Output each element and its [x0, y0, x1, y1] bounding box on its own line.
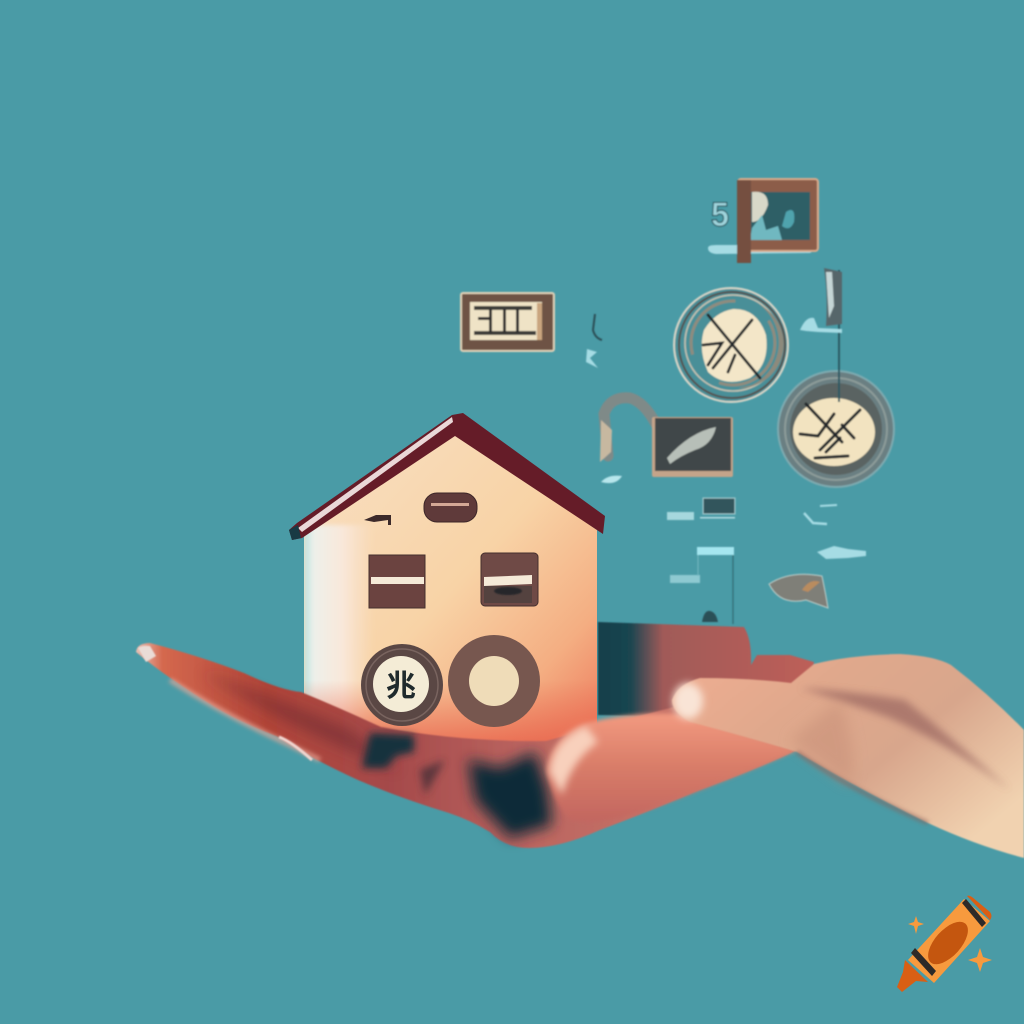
finger shadow: [800, 688, 1010, 790]
icon: hook and tablet box: [600, 398, 733, 477]
sparkle large: [968, 948, 992, 972]
sparkle small: [908, 916, 924, 934]
crayon cap: [967, 896, 992, 920]
finger lower edge light: [170, 680, 320, 760]
connector line: [838, 270, 840, 402]
house walls: [304, 432, 597, 750]
small wall mark: [364, 515, 391, 525]
crayon body: [908, 899, 990, 983]
left coin: 兆: [386, 670, 416, 703]
right window: [481, 553, 538, 606]
icon: crossed circle upper: [674, 288, 788, 402]
icon: top-right vial: [800, 268, 842, 333]
crayon bands: [962, 899, 986, 927]
roof: [289, 413, 605, 540]
small scribbles and labels: [586, 314, 866, 624]
palm dark patches: [362, 733, 414, 768]
finger shading: [200, 672, 400, 770]
left window: [369, 555, 425, 608]
left hand and palm: [136, 643, 797, 848]
icon: framed picture: [708, 179, 818, 263]
knuckle shading: [790, 700, 853, 785]
upper oval window: [424, 493, 477, 522]
crayon label: [921, 915, 975, 971]
lower edge shadow: [797, 752, 928, 823]
thumb base: [547, 714, 797, 822]
right coin: [448, 635, 540, 727]
icon: crossed circle lower: [778, 270, 894, 487]
thumb highlight: [673, 683, 703, 719]
dark object behind house: [598, 622, 814, 716]
house: [289, 413, 605, 755]
hand holding the house: [136, 643, 1024, 858]
crayon tip: [897, 960, 928, 992]
right hand: [672, 654, 1024, 858]
icon: small rectangular gauge: [461, 293, 554, 351]
icon label: number: 5: [711, 196, 729, 234]
finger highlights: [279, 737, 312, 760]
icon: crayon watermark: [897, 896, 992, 992]
left coin: [361, 644, 443, 726]
